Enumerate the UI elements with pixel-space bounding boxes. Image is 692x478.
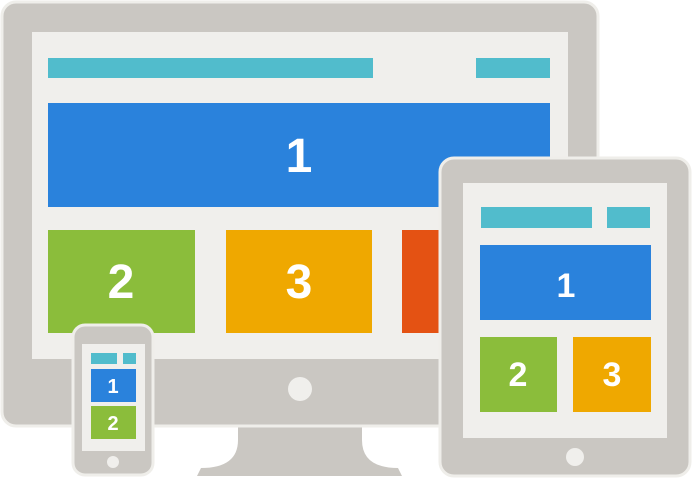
tablet block 3: 3: [603, 356, 621, 394]
tablet button: [566, 448, 584, 466]
monitor block 1: [48, 103, 550, 207]
monitor screen: [32, 32, 568, 359]
phone block 1: 1: [107, 376, 119, 398]
phone block 1: [91, 369, 136, 402]
monitor block 4: [402, 230, 462, 333]
tablet: [440, 158, 690, 476]
monitor header bars: [48, 58, 550, 78]
monitor block 3: [226, 230, 372, 333]
tablet block 3: [573, 337, 651, 412]
monitor block 3: 3: [286, 256, 312, 309]
monitor block 2: [48, 230, 195, 333]
phone header bars: [91, 353, 136, 364]
monitor bezel: [2, 2, 598, 426]
monitor block 2: 2: [108, 256, 134, 309]
phone screen: [82, 344, 145, 451]
monitor block 1: 1: [286, 130, 312, 183]
phone: [73, 325, 153, 475]
tablet block 2: [480, 337, 557, 412]
phone block 2: [91, 406, 136, 439]
tablet header bars: [481, 207, 650, 228]
phone button: [107, 456, 119, 468]
tablet block 1: 1: [557, 267, 575, 305]
phone block 2: 2: [107, 413, 119, 435]
tablet block 2: 2: [509, 356, 527, 394]
tablet block 1: [480, 245, 651, 320]
tablet screen: [463, 183, 667, 438]
monitor button: [288, 377, 312, 401]
monitor stand: [197, 420, 402, 476]
